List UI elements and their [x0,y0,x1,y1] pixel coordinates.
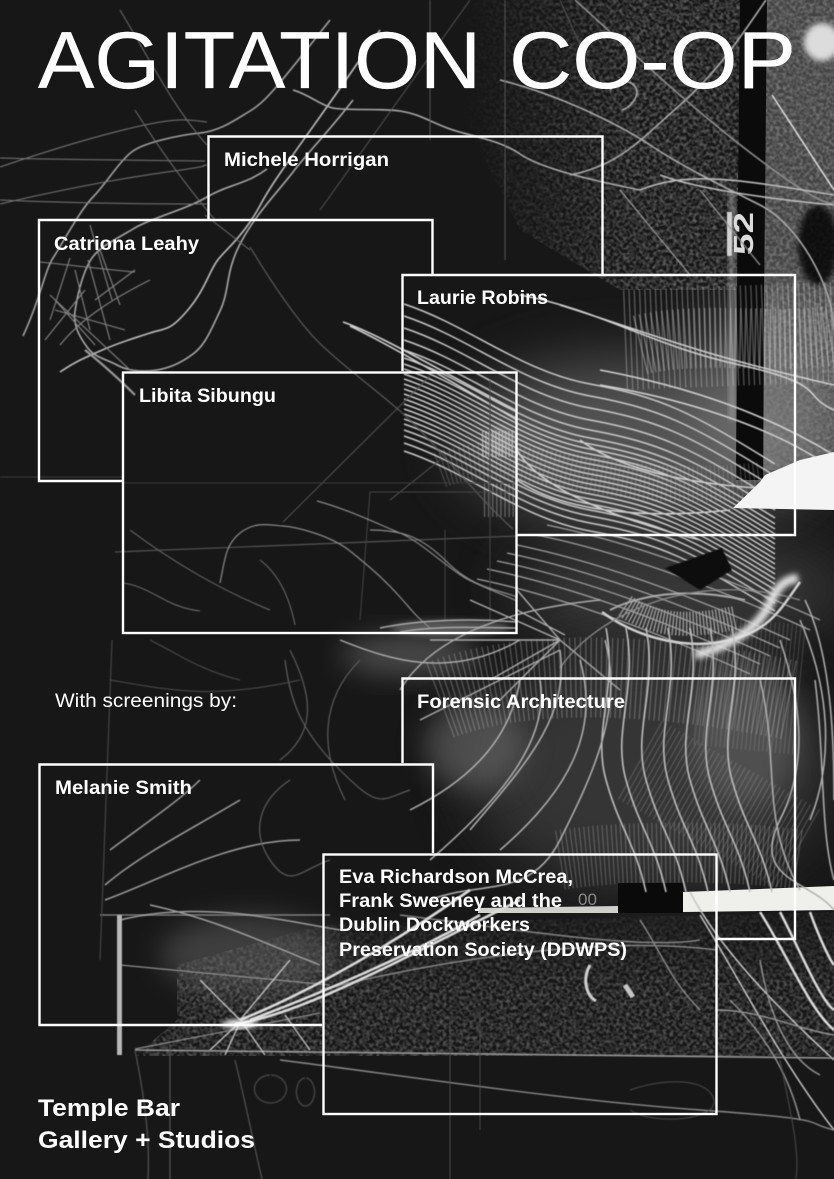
scratch cluster in Catriona Leahy [40,225,150,370]
names: Eva Richardson McCrea, Frank Sweeney and the Dublin Dockworkers Preservation Society: Eva Richardson McCrea, [339,867,573,888]
dark film strip [736,0,767,480]
panel: Laurie Robins [402,275,795,535]
faint film edge digits: 00 [578,890,597,909]
logo: Temple Bar Gallery + Studios: Temple Bar [38,1095,180,1122]
panel: Libita Sibungu [123,372,516,633]
bright loop [560,582,800,668]
strands in Libita Sibungu [220,525,430,628]
name: Laurie Robins: Laurie Robins [417,288,548,309]
text: with screenings by: With screenings by: [55,691,237,712]
name: Michele Horrigan: Michele Horrigan [224,150,389,171]
horizontal base line [100,640,834,1179]
white exposed patches [733,452,834,510]
names: Eva Richardson McCrea, Frank Sweeney and the Dublin Dockworkers Preservation Society: Frank Sweeney and the [339,891,562,912]
names: Eva Richardson McCrea, Frank Sweeney and the Dublin Dockworkers Preservation Society: Preservation Society (DDWPS) [339,940,627,961]
film frame number: 52 [728,212,759,255]
fan of wavy lines below Forensic Architecture [340,590,834,910]
central lower left strands [105,640,520,1055]
long scratches upper area [0,0,834,632]
panel: Eva Richardson McCrea, Frank Sweeney and DDWPS [324,854,716,1114]
name: Libita Sibungu: Libita Sibungu [139,386,276,407]
hatching [440,332,834,860]
title: CO-OP [509,16,796,106]
line bundle across Laurie Robins frame [343,295,834,674]
lower right scratches [320,892,834,1130]
logo: Temple Bar Gallery + Studios: Gallery + Studios [38,1127,255,1154]
names: Eva Richardson McCrea, Frank Sweeney and the Dublin Dockworkers Preservation Society: Dublin Dockworkers [339,915,530,936]
tonal areas [455,0,740,290]
panel: Forensic Architecture [402,678,795,939]
panel: Michele Horrigan [208,136,602,274]
name: Melanie Smith: Melanie Smith [55,778,192,799]
title: AGITATION [38,16,481,106]
panel: Catriona Leahy [39,220,432,481]
name: Catriona Leahy: Catriona Leahy [54,234,199,255]
panel: Melanie Smith [40,764,433,1025]
fine diagonal scratches [250,247,513,529]
name: Forensic Architecture: Forensic Architecture [417,692,625,713]
